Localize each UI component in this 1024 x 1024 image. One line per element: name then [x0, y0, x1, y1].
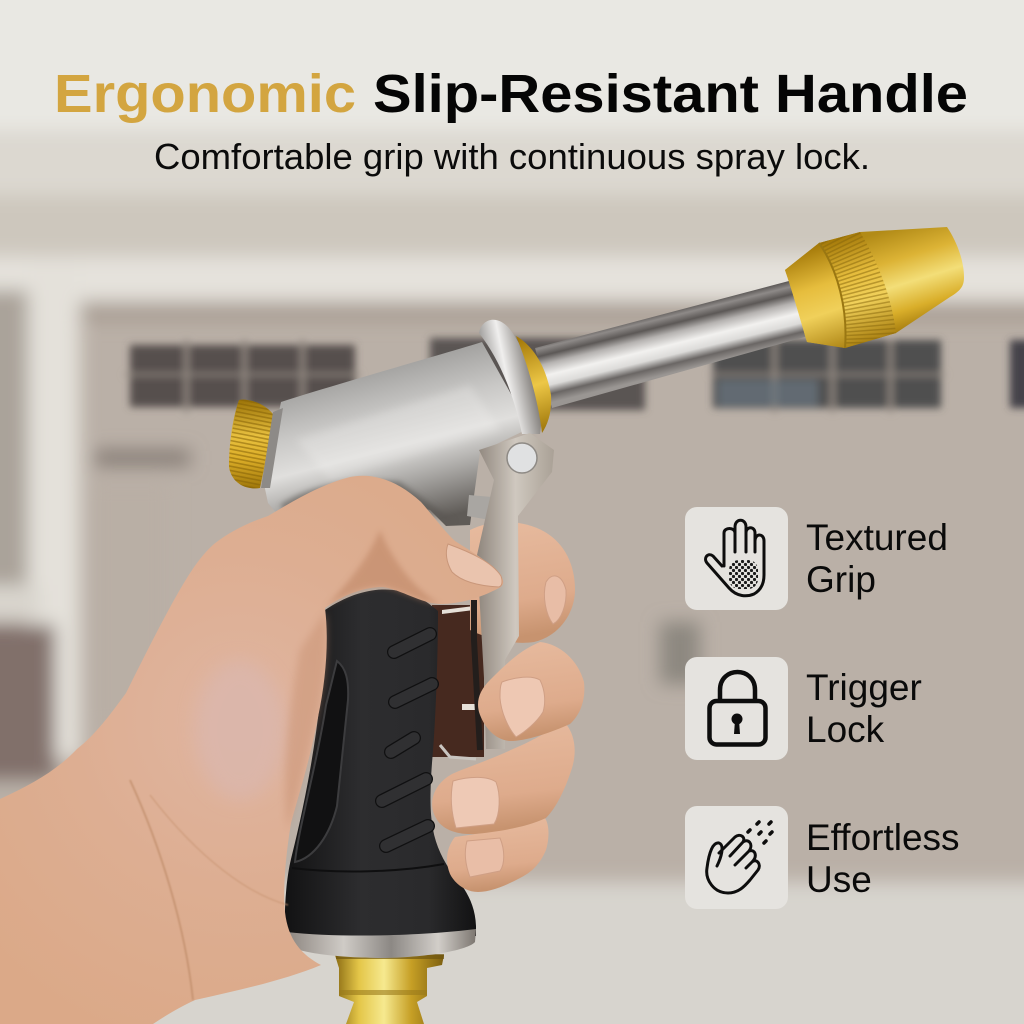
- title: [54, 64, 968, 124]
- icon card: trigger lock: [685, 657, 788, 760]
- feature: effortless use: [685, 806, 960, 909]
- icon: padlock: [710, 672, 766, 744]
- flange ring: [479, 320, 541, 434]
- gun body: [264, 342, 530, 526]
- icon: hand with textured palm: [706, 520, 764, 596]
- ring finger: [432, 724, 575, 834]
- icon: hand with spray drops: [707, 822, 772, 893]
- thumb nail: [446, 544, 502, 587]
- gold collar: [516, 336, 551, 433]
- index finger nail: [544, 576, 566, 624]
- trigger backdrop shadow: [432, 605, 484, 757]
- spray nozzle product: [225, 225, 964, 1024]
- body dark reflection: [280, 481, 455, 522]
- label: effortless use: Effortless: [806, 817, 960, 858]
- wrist crease: [130, 780, 193, 1000]
- trigger lever: [467, 433, 554, 750]
- black rubber grip: [285, 589, 476, 936]
- label: textured grip: Textured: [806, 517, 948, 558]
- front nozzle: [785, 225, 964, 355]
- brass base connector: [335, 954, 444, 1024]
- rear gold knob: [229, 400, 283, 488]
- label: effortless use: Use: [806, 859, 872, 900]
- metal base band: [287, 929, 476, 958]
- grip slots: [382, 634, 432, 846]
- feature: textured grip: [685, 507, 948, 610]
- palm highlight: [195, 660, 285, 800]
- title: Slip-Resistant Handle: [373, 64, 968, 124]
- palm and wrist: [0, 476, 503, 1024]
- gap highlights behind trigger: [442, 606, 475, 710]
- icon card: textured grip: [685, 507, 788, 610]
- feature: trigger lock: [685, 657, 922, 760]
- label: trigger lock: Trigger: [806, 667, 922, 708]
- label: textured grip: Grip: [806, 559, 876, 600]
- index finger behind trigger: [470, 522, 575, 643]
- palm shadow beside grip: [285, 612, 327, 830]
- pivot pin: [507, 443, 537, 473]
- thumb crease shadow: [325, 530, 440, 608]
- title: Ergonomic: [54, 64, 356, 124]
- body bright highlight: [296, 385, 500, 480]
- grip side panel: [295, 661, 348, 862]
- blurred garage windows: [125, 338, 1024, 412]
- middle finger: [478, 642, 584, 741]
- metal tube: [535, 277, 812, 408]
- label: trigger lock: Lock: [806, 709, 885, 750]
- little finger: [447, 818, 548, 892]
- hand gripping the nozzle: [0, 476, 584, 1024]
- trigger lock clip: [440, 745, 476, 759]
- icon card: effortless use: [685, 806, 788, 909]
- subtitle: Comfortable grip with continuous spray lock.: [154, 136, 870, 177]
